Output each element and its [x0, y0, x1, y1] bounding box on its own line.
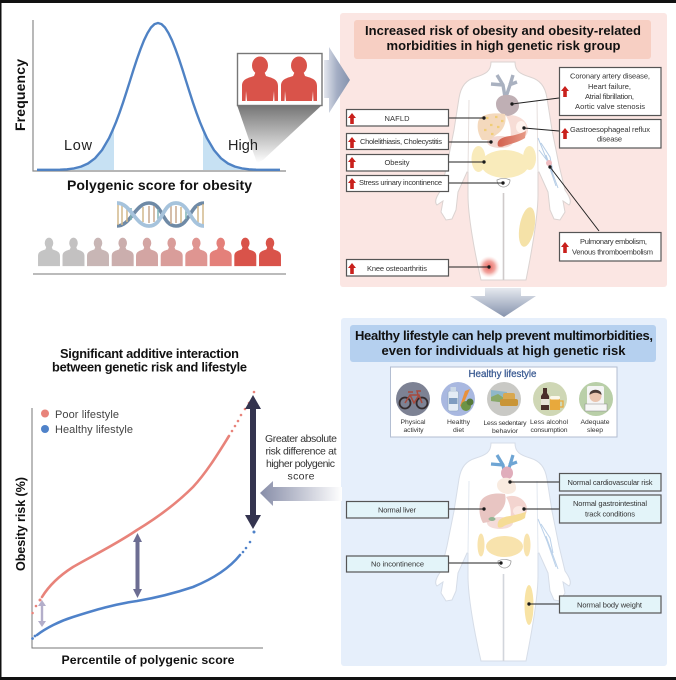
organ: pancreas	[498, 512, 526, 528]
fat: abdomen left lobe	[472, 146, 486, 172]
population row	[33, 238, 286, 274]
arrow: large difference	[245, 395, 261, 529]
label: coronary and heart conditions: Atrial fibrillation,	[585, 92, 634, 101]
text: healthy diet	[447, 419, 471, 434]
text: less alcohol consumption: consumption	[530, 427, 568, 434]
panel: polygenic score distribution	[12, 20, 286, 193]
label: normal body weight	[560, 596, 661, 613]
arm veins	[538, 138, 558, 188]
organ: liver	[479, 493, 506, 523]
blood clot	[546, 160, 552, 166]
organ: heart top	[501, 466, 513, 480]
annotation: greater absolute risk difference	[265, 433, 337, 482]
organ: liver nodules	[484, 117, 504, 134]
icon: healthy diet	[441, 382, 475, 416]
bell curve	[37, 23, 280, 170]
arrow: small difference	[38, 600, 46, 627]
label: coronary and heart conditions	[560, 68, 661, 116]
icon: physical activity	[396, 382, 430, 416]
label: normal cardiovascular risk: Normal cardiovascular risk	[568, 478, 653, 487]
label: knee osteoarthritis	[346, 260, 448, 276]
heading: healthy lifestyle: Healthy lifestyle can help prevent multimorbidities,	[355, 328, 653, 343]
text: healthy diet: Healthy	[447, 419, 471, 426]
callout: high risk people	[238, 54, 322, 106]
legend: Healthy lifestyle	[55, 424, 133, 436]
label: high: High	[228, 138, 258, 154]
label: normal cardiovascular risk	[560, 474, 661, 491]
callout: zoom shadow	[237, 105, 322, 163]
label: pulmonary embolism	[560, 232, 661, 261]
high tail area	[203, 130, 250, 170]
arrow: to increased risk panel	[324, 47, 350, 113]
leader lines	[449, 98, 599, 268]
chart: obesity risk by polygenic score	[14, 391, 337, 667]
heading: healthy lifestyle: even for individuals at high genetic risk	[382, 343, 626, 358]
heading: additive interaction	[52, 346, 247, 374]
organ: liver	[478, 113, 506, 140]
y axis title: Frequency	[12, 59, 28, 131]
text: adequate sleep: Adequate	[580, 419, 610, 426]
label: no incontinence	[346, 556, 448, 572]
text: less alcohol consumption: Less alcohol	[530, 419, 568, 426]
label: NAFLD: NAFLD	[384, 114, 410, 123]
arrow: down to healthy lifestyle panel	[470, 288, 536, 317]
organ: great vessels	[491, 75, 517, 97]
organ: lower stomach shade	[487, 136, 513, 148]
label: pulmonary embolism: Venous thromboembolism	[572, 248, 653, 256]
label: low: Low	[64, 138, 93, 154]
annotation: greater absolute risk difference: risk difference at	[266, 446, 337, 458]
heading: additive interaction: between genetic risk and lifestyle	[52, 360, 247, 374]
organ: lower stomach shade	[487, 517, 513, 529]
torso lines	[468, 100, 538, 172]
label: NAFLD	[346, 110, 448, 126]
label: no incontinence: No incontinence	[371, 560, 424, 568]
label: cholelithiasis	[346, 134, 448, 150]
x axis title: Percentile of polygenic score	[62, 653, 235, 667]
heading: increased risk: morbidities in high genetic risk group	[386, 38, 621, 53]
icon: less alcohol consumption	[533, 382, 567, 416]
text: less alcohol consumption	[530, 419, 568, 434]
text: physical activity	[400, 419, 426, 434]
label: coronary and heart conditions: Aortic valve stenosis	[575, 102, 645, 111]
label: obesity: Obesity	[384, 158, 410, 167]
text: adequate sleep: sleep	[587, 427, 603, 434]
label: normal gastrointestinal	[560, 495, 661, 523]
fat: abdomen	[481, 150, 529, 178]
legend: Poor lifestyle	[55, 409, 119, 421]
text: adequate sleep	[580, 419, 610, 434]
icon: DNA helix	[117, 203, 204, 226]
fat: right flank	[524, 534, 530, 556]
label: normal liver: Normal liver	[378, 506, 416, 514]
icon: adequate sleep	[579, 382, 613, 416]
leader lines	[449, 481, 559, 605]
label: coronary and heart conditions: Heart failure,	[588, 82, 631, 91]
text: healthy diet: diet	[453, 427, 464, 434]
label: gastroesophageal reflux: disease	[597, 134, 622, 144]
label: gastroesophageal reflux: Gastroesophageal reflux	[570, 125, 650, 134]
label: cholelithiasis: Cholelithiasis, Cholecystitis	[360, 137, 442, 146]
label: coronary and heart conditions: Coronary artery disease,	[570, 72, 650, 80]
fat: left flank	[478, 534, 484, 556]
organ: stomach highlight	[516, 121, 526, 133]
annotation: greater absolute risk difference: score	[288, 470, 315, 482]
organ: stomach	[506, 496, 527, 520]
torso lines	[468, 481, 538, 553]
text: less sedentary behavior: behavior	[492, 428, 519, 435]
label: normal gastrointestinal: track conditions	[585, 510, 635, 518]
label: pulmonary embolism: Pulmonary embolism,	[580, 237, 647, 246]
annotation: greater absolute risk difference: Greater absolute	[265, 433, 337, 445]
heading: healthy lifestyle	[350, 325, 656, 362]
organ: heart	[496, 95, 519, 116]
label: knee osteoarthritis: Knee osteoarthritis	[367, 264, 427, 273]
x axis title: Polygenic score for obesity	[67, 177, 252, 193]
box title: Healthy lifestyle	[468, 369, 537, 380]
inner leg line	[502, 193, 504, 280]
label: gastroesophageal reflux	[560, 120, 661, 148]
heading: additive interaction: Significant additive interaction	[60, 346, 239, 361]
label: stress urinary incontinence: Stress urinary incontinence	[359, 178, 442, 187]
organ: bladder	[498, 560, 511, 568]
arrow: medium difference	[133, 533, 142, 598]
label: normal liver	[346, 502, 448, 518]
series: healthy lifestyle	[31, 530, 255, 640]
arm veins	[538, 519, 558, 569]
organ: pancreas	[498, 131, 526, 147]
series: poor lifestyle	[31, 391, 255, 614]
panel: increased risk	[340, 13, 667, 287]
organ: heart	[497, 478, 516, 494]
body figure	[436, 62, 570, 280]
organ: great vessels	[491, 455, 517, 477]
organ: stomach	[506, 115, 528, 140]
annotation: greater absolute risk difference: higher polygenic	[266, 458, 335, 470]
axes	[32, 408, 263, 648]
panel: healthy lifestyle	[341, 318, 667, 666]
icon: less sedentary behavior	[487, 382, 521, 416]
label: obesity	[346, 154, 448, 171]
heading: increased risk	[354, 20, 651, 59]
label: normal gastrointestinal: Normal gastrointestinal	[573, 499, 647, 508]
y axis title: Obesity risk (%)	[14, 477, 28, 571]
fat: abdomen right lobe	[523, 146, 536, 170]
knee inflammation	[478, 256, 500, 278]
organ: gallbladder	[488, 517, 496, 521]
inner leg line	[502, 574, 504, 661]
axes	[33, 20, 286, 171]
text: less sedentary behavior: Less sedentary	[484, 420, 527, 427]
text: less sedentary behavior	[484, 420, 527, 435]
organ: stomach highlight	[513, 506, 525, 516]
text: physical activity: Physical	[400, 419, 426, 426]
low tail area	[62, 127, 114, 170]
label: normal body weight: Normal body weight	[577, 600, 643, 610]
body figure	[436, 443, 570, 661]
fat: thigh	[524, 585, 534, 625]
fat: thigh	[516, 206, 538, 248]
legend	[41, 409, 133, 436]
text: physical activity: activity	[404, 427, 424, 434]
box: healthy lifestyle factors	[390, 367, 617, 437]
arrow: left to interaction chart	[260, 481, 342, 506]
organ: bladder	[497, 178, 510, 187]
label: stress urinary incontinence	[346, 176, 448, 192]
heading: increased risk: Increased risk of obesity and obesity-related	[365, 23, 641, 38]
fat: abdomen	[486, 536, 523, 557]
